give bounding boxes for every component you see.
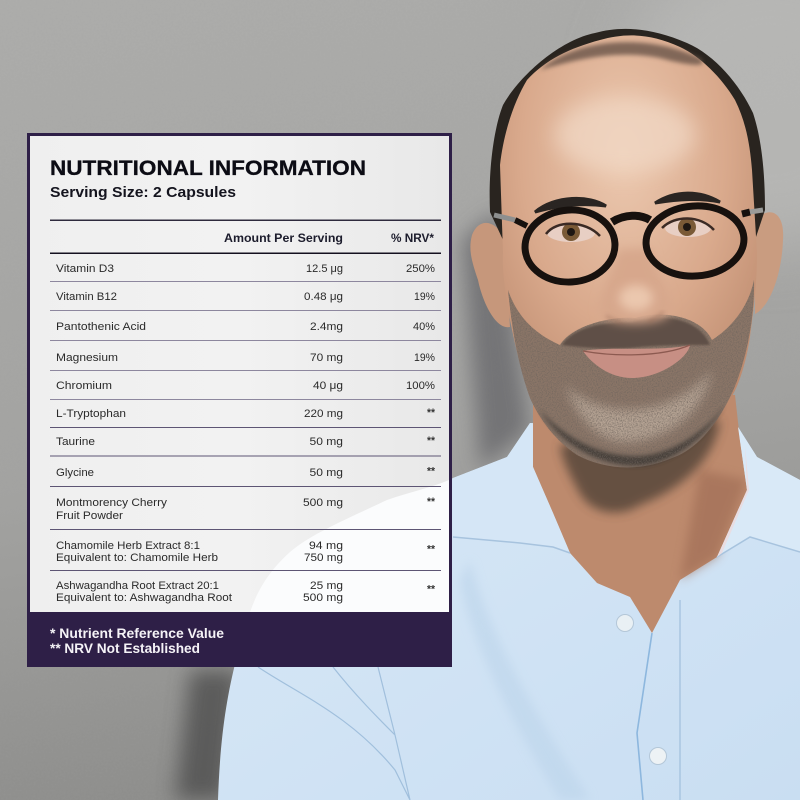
row: Chromium: 40 μg [313,380,343,392]
footer: NRV notes: ** NRV Not Established [50,641,200,656]
row: Chromium: 100% [406,380,435,392]
row: Chamomile Herb Extract [50,540,441,571]
lips [583,345,690,378]
row: Glycine: Glycine [56,467,94,479]
shirt body [218,423,800,800]
row: Magnesium: 19% [414,352,435,364]
row: Ashwagandha Root Extract: 25 mg [310,580,343,592]
footer: NRV notes: * Nutrient Reference Value [50,626,225,641]
nostrils [606,312,664,323]
inner collar sliver [717,445,749,557]
glasses [494,203,763,285]
left brow [535,198,606,212]
left ear [470,223,510,327]
row: Glycine [50,466,441,487]
table header: % NRV* [391,233,435,245]
row: Chamomile Herb Extract: ** [427,544,436,556]
row: Taurine [50,435,441,456]
panel frame [27,133,452,667]
collar edges [453,537,800,557]
row: Chamomile Herb Extract: 94 mg [309,540,343,552]
nose tip [619,285,653,311]
row: Chromium [50,380,441,400]
beard highlight [565,370,712,442]
heading [50,157,366,201]
moustache [562,317,710,348]
shirt shading [460,560,590,800]
footer: NRV notes [27,612,452,667]
row: Taurine: Taurine [56,436,95,448]
lip line [583,345,690,355]
row: Vitamin D3 [50,263,441,282]
row: Ashwagandha Root Extract [56,580,436,604]
placket and sleeve seams [637,633,652,800]
row: Vitamin B12 [50,291,441,311]
row: Vitamin B12: 19% [414,291,435,303]
row: Montmorency Cherry Fruit Powder [50,496,441,530]
nose [599,248,671,323]
row: Montmorency Cherry Fruit Powder: ** [427,496,436,508]
row: Magnesium [50,352,441,371]
row: L-Tryptophan: 220 mg [304,408,343,420]
row: Taurine: ** [427,435,436,447]
button 2 [650,748,666,764]
left eye [546,223,600,242]
head skin [500,35,757,465]
row: Vitamin D3: Vitamin D3 [56,263,114,275]
row: Chamomile Herb Extract: 750 mg [304,552,343,564]
row: Glycine: 50 mg [310,467,343,479]
row: Ashwagandha Root Extract: ** [427,584,436,596]
neck stubble [560,420,720,513]
right ear [755,212,783,314]
heading: Serving Size: 2 Capsules [50,184,236,201]
thinning hair on crown [540,42,703,70]
row: L-Tryptophan: L-Tryptophan [56,408,126,420]
panel: nutritional information [27,133,452,667]
right eye [662,218,714,237]
right brow [655,193,720,203]
row: Taurine: 50 mg [310,436,343,448]
forehead highlight [555,97,695,173]
table header: Amount Per Serving [224,233,343,245]
neck shadow [680,470,747,580]
row: Ashwagandha Root Extract: Equivalent to: Ashwagandha Root [56,592,232,604]
button 1 [616,614,634,632]
row: Vitamin B12: Vitamin B12 [56,291,117,303]
row: Vitamin B12: 0.48 μg [304,291,343,303]
row: Pantothenic Acid [50,321,441,341]
panel background [30,136,449,612]
row: Montmorency Cherry Fruit Powder: 500 mg [303,497,343,509]
row: Ashwagandha Root Extract: 500 mg [303,592,343,604]
row: Magnesium: 70 mg [310,352,343,364]
row: Pantothenic Acid: Pantothenic Acid [56,321,146,333]
table header [50,220,441,254]
heading: NUTRITIONAL INFORMATION [50,157,366,180]
row: Glycine: ** [427,466,436,478]
man photo illustration [218,29,800,800]
row: Magnesium: Magnesium [56,352,118,364]
row: Pantothenic Acid: 2.4mg [310,321,343,333]
row: Montmorency Cherry Fruit Powder: Fruit Powder [56,510,123,522]
right collar [717,427,800,557]
left collar [453,423,570,553]
row: Pantothenic Acid: 40% [413,321,435,333]
row: L-Tryptophan: ** [427,407,436,419]
row: L-Tryptophan [50,407,441,428]
hair [490,29,765,240]
row: Ashwagandha Root Extract: Ashwagandha Root Extract 20:1 [56,580,219,592]
beard dark edge [540,405,725,466]
row: Chamomile Herb Extract: Equivalent to: Chamomile Herb [56,552,218,564]
beard [508,280,754,467]
row: Montmorency Cherry Fruit Powder: Montmorency Cherry [56,497,168,509]
beard stubble texture [508,280,754,467]
row: Vitamin D3: 12.5 μg [306,263,343,275]
neck [533,395,747,633]
row: Vitamin D3: 250% [406,263,435,275]
row: Chamomile Herb Extract: Chamomile Herb Extract 8:1 [56,540,200,552]
row: Chromium: Chromium [56,380,112,392]
